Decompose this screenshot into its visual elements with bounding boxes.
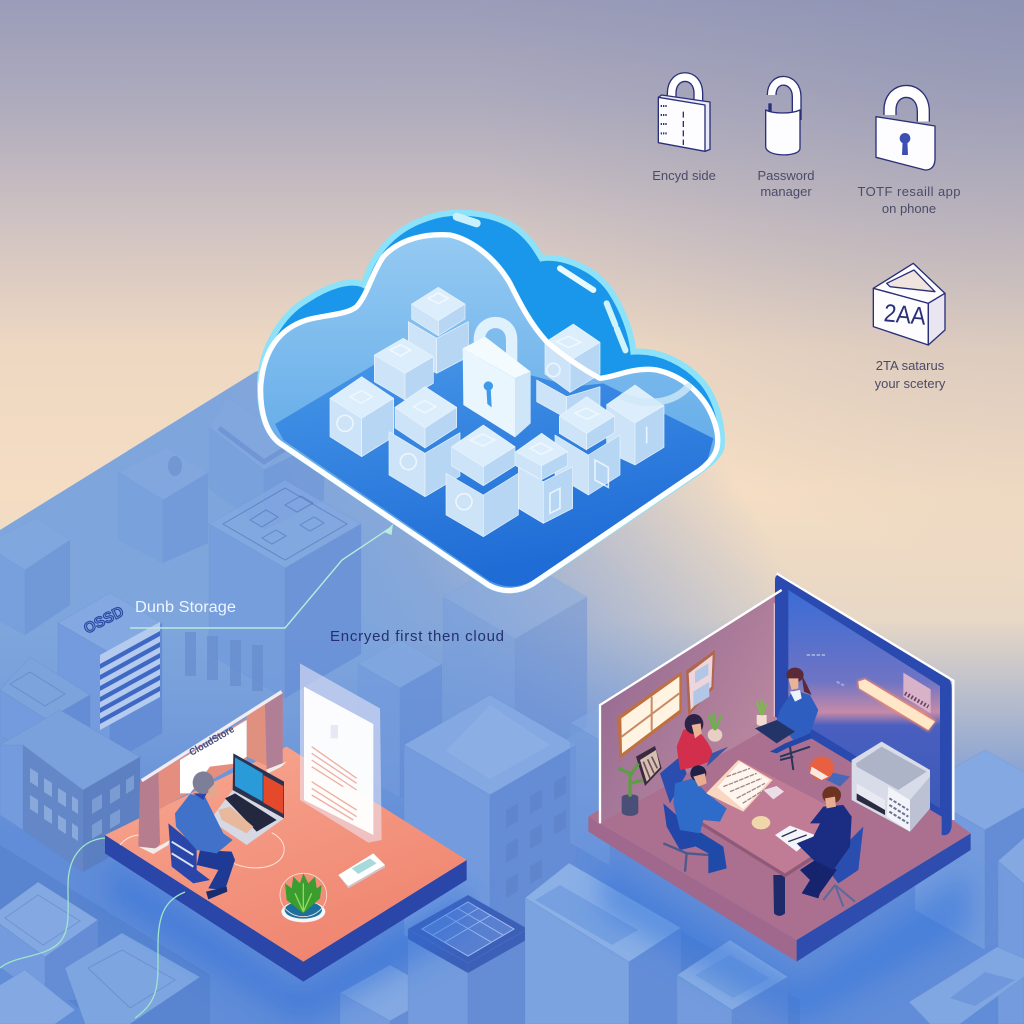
block: back left [374, 338, 433, 400]
panel: meeting room [588, 573, 971, 962]
label: TOTF resaill app on phone: TOTF resaill app [858, 184, 960, 199]
floor side faces [588, 817, 797, 962]
person: man in blue chair back [663, 803, 708, 872]
left wall [600, 590, 782, 823]
cloud front rim [261, 235, 718, 590]
cloud inner front [261, 235, 718, 590]
building: left edge [0, 518, 70, 635]
block: back top [408, 287, 468, 373]
building: right [915, 750, 1024, 950]
printer cabinet [852, 742, 930, 832]
floor [588, 693, 971, 940]
block icons [337, 293, 647, 513]
sphere object [810, 756, 850, 787]
side plants [708, 700, 767, 742]
label: Encryed first then cloud: Encryed first then cloud [330, 628, 504, 645]
platform side [105, 835, 467, 982]
label: password manager [757, 168, 815, 199]
block stack: front right [516, 433, 573, 523]
label: encrypted side: Encyd side [652, 168, 716, 183]
block stack: front centre [446, 425, 518, 537]
right wall inner [788, 590, 940, 808]
wire lines to desk [0, 838, 185, 1018]
icon: padlock with keyhole [876, 91, 935, 170]
laptop [210, 753, 284, 845]
icon: open padlock [766, 81, 800, 155]
cloud with encrypted blocks [260, 213, 722, 590]
building: behind cloud [443, 555, 587, 769]
label: 2AA on box: 2AA [883, 299, 927, 331]
building: left windows [0, 710, 140, 872]
cloud floor [275, 333, 713, 586]
right wall frame [775, 575, 952, 835]
floating document panel [300, 663, 382, 843]
floor plant [618, 763, 643, 816]
label: 2TA satarus your scetery: 2TA satarus [876, 358, 945, 373]
arrow: storage to cloud [130, 526, 392, 628]
wall top edges [600, 573, 953, 823]
padlock in cloud [463, 322, 531, 437]
panel: user desk platform [105, 663, 467, 982]
label: 2TA satarus your scetery [875, 358, 946, 391]
bookshelf [636, 746, 662, 786]
building: server with OSSD roof [58, 593, 162, 763]
building: bottom corner [0, 970, 75, 1024]
building: lower left A [0, 882, 98, 1000]
label: Dunb Storage: Dunb Storage [135, 599, 236, 616]
block: right back [607, 385, 664, 465]
block stack: centre left [389, 387, 460, 497]
label: TOTF resaill app on phone [858, 184, 960, 216]
platform top [105, 747, 467, 962]
icon: notebook lock [658, 77, 710, 151]
white arcs [120, 833, 284, 868]
building: solar roof [408, 895, 528, 1024]
banner text: CloudStore [188, 724, 237, 759]
label: password manager: Password [757, 168, 815, 183]
building: lower left B [65, 933, 200, 1024]
pinboard [686, 650, 715, 716]
rim highlights [457, 217, 688, 402]
meeting table [702, 760, 833, 916]
block stacks [330, 287, 600, 457]
building: far back [209, 397, 324, 530]
building: back left [118, 447, 208, 563]
person: man seated right [797, 786, 863, 907]
phone on desk [338, 853, 385, 888]
partition wall [138, 692, 287, 854]
person at laptop [168, 771, 253, 899]
building: upper box left [0, 657, 90, 765]
building: right lower [998, 838, 1024, 1024]
person: woman with laptop [755, 668, 818, 770]
person: man seated left [673, 765, 727, 873]
roof label: OSSD [81, 603, 127, 638]
block: back right [537, 324, 600, 418]
building: bottom right [677, 940, 788, 1024]
block stack: right [555, 397, 620, 495]
icons and labels [652, 77, 960, 391]
cloud back shell [260, 213, 722, 590]
label: TOTF resaill app on phone: on phone [882, 201, 936, 216]
building: mid [358, 640, 442, 798]
building: far bottom right [909, 947, 1024, 1024]
label: password manager: manager [760, 184, 812, 199]
shadows beneath platforms [110, 860, 970, 1024]
person: woman in red [660, 714, 728, 803]
potted plant [280, 873, 327, 922]
wall light bar [807, 655, 936, 732]
papers on table [706, 760, 815, 852]
icon: 2AA box [873, 263, 945, 345]
window [618, 672, 682, 759]
city ground [0, 300, 1024, 1024]
block: left [330, 377, 394, 457]
building: centre tall [404, 695, 576, 985]
building: bottom middle [340, 965, 440, 1024]
building: behind room [570, 700, 650, 866]
isometric city buildings [0, 397, 1024, 1024]
building: gabled bottom large [525, 863, 681, 1024]
label: 2TA satarus your scetery: your scetery [875, 376, 946, 391]
building: roof plan [185, 480, 361, 698]
